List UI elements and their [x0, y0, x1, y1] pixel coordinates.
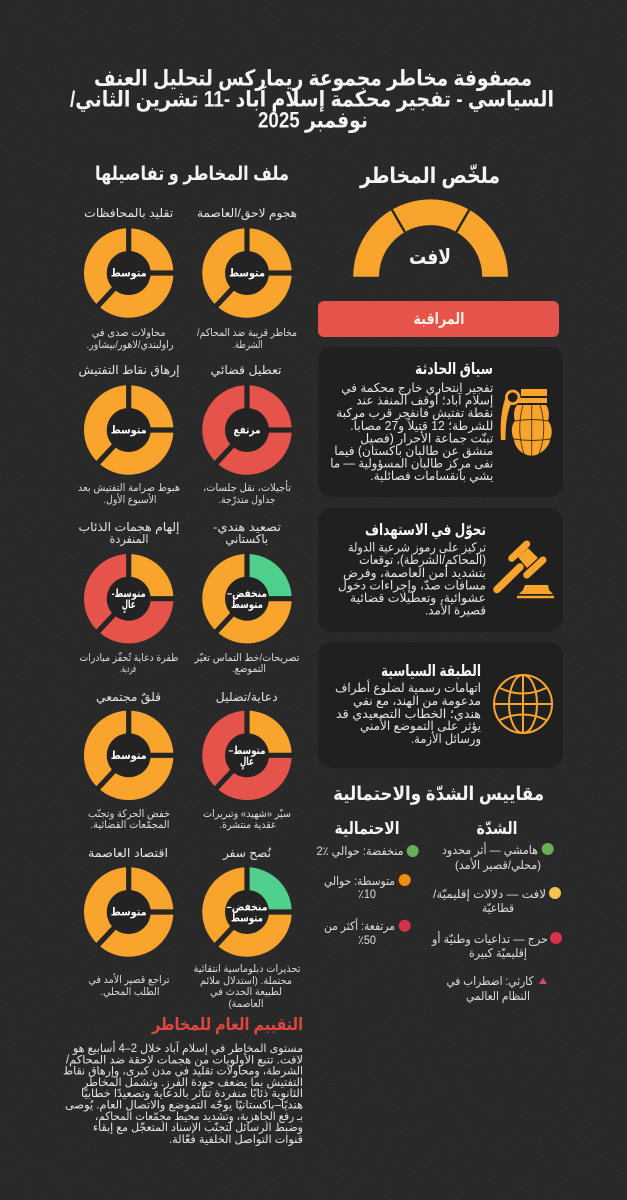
risk card: provincial imitation: راولبندي/لاهور/بيشاور.: [86, 339, 174, 351]
panel body: تركيز على رموز شرعية الدولة: [348, 540, 486, 556]
banner: monitoring: المراقبة: [414, 311, 464, 328]
panel body: نقطة تفتيش فانفجر قرب مركبة: [336, 406, 493, 421]
overall assessment body: هنديًا–باكستانيًا يوجّه التموضع والاتصال العام. يُوصى: [65, 1099, 303, 1113]
overall assessment body: قنوات التواصل الخلفية فعّالة.: [169, 1134, 303, 1147]
panel heading: تحوّل في الاستهداف: [365, 522, 486, 540]
risk card: propaganda and disinformation: [202, 690, 293, 831]
risk card: lone wolf inspiration: [78, 520, 180, 675]
risk card: community anxiety: قلقٌ مجتمعي: [96, 690, 161, 705]
probability: high: مرتفعة: أكثر من: [324, 918, 395, 934]
gauge: [353, 199, 508, 277]
donut chart: متوسط: [111, 906, 147, 918]
risk card: India-Pakistan escalation: تصريحات/خط التماس تغيّر: [194, 652, 300, 664]
probability: medium: [324, 874, 411, 901]
risk card: checkpoint fatigue: الأسبوع الأول.: [104, 493, 156, 506]
donut chart: منخفض–: [227, 588, 267, 600]
risk card: checkpoint fatigue: إرهاق نقاط التفتيش: [78, 363, 180, 378]
donut chart: متوسط-: [112, 588, 146, 600]
severity: notable: [433, 887, 561, 915]
panel body: [338, 540, 486, 618]
overall assessment body: التفتيش بما يضعف جودة الفرز. وتشمل المخاطر: [82, 1077, 303, 1090]
risk card: India-Pakistan escalation: باكستاني: [225, 532, 268, 546]
title: مصفوفة مخاطر مجموعة ريماركس لتحليل العنف: [94, 66, 532, 92]
overall assessment: [63, 1015, 303, 1147]
risk card: travel advisory: نُصح سفر: [222, 846, 271, 861]
donut chart: [84, 553, 175, 643]
probability scale: [316, 819, 419, 947]
banner: monitoring: [318, 301, 559, 337]
donut chart: [84, 866, 175, 957]
overall assessment heading: التقييم العام للمخاطر: [151, 1015, 303, 1035]
probability: medium: متوسطة: حوالي: [324, 874, 395, 889]
donut chart: متوسط: [111, 750, 147, 762]
probability: high: ٪50: [358, 933, 376, 947]
donut chart: متوسط–: [228, 745, 266, 757]
overall assessment body: وضبط الرسائل لتجنّب الإسناد المتعجّل مع إبقاء: [93, 1122, 303, 1135]
risk card: lone wolf inspiration: إلهام هجمات الذئاب: [78, 520, 180, 534]
risk card: travel advisory: [194, 846, 301, 1010]
risk card: judicial disruption: تعطيل قضائي: [210, 363, 282, 377]
panel heading: سياق الحادثة: [415, 361, 493, 378]
panel body: يشي بانقسامات فصائلية.: [370, 469, 494, 483]
donut chart: عالٍ: [240, 756, 254, 770]
risk card: travel advisory: محتملة. (استدلال ملائم: [200, 975, 292, 987]
risk card: provincial imitation: تقليد بالمحافظات: [84, 206, 173, 220]
risk card: travel advisory: العاصمة): [228, 998, 264, 1010]
title: نوفمبر 2025: [258, 108, 368, 134]
donut chart: منخفض–: [226, 902, 268, 914]
icon: grenade: [501, 389, 552, 456]
heading: risk profile: ملف المخاطر و تفاصيلها: [95, 164, 289, 185]
risk card: capital economy: الطلب المحلي.: [100, 986, 160, 998]
panel: targeting shift: [318, 508, 563, 632]
donut chart: [84, 384, 175, 475]
donut chart: [202, 709, 293, 800]
donut chart: [202, 227, 293, 318]
overall assessment body: مستوى المخاطر في إسلام آباد خلال 2–4 أسابيع هو: [72, 1040, 303, 1056]
donut chart: [84, 709, 175, 800]
risk card: follow-up attack: مخاطر قريبة ضد المحاكم/: [197, 327, 297, 339]
donut chart: [84, 227, 175, 318]
probability: low: منخفضة: حوالي ٪2: [316, 844, 404, 859]
risk card: India-Pakistan escalation: التموضع.: [232, 663, 266, 675]
risk card: provincial imitation: [84, 206, 175, 351]
severity: critical: إقليميّة كبيرة: [469, 946, 527, 961]
risk card: lone wolf inspiration: طفرة دعاية تُحفّز مبادرات: [80, 652, 178, 664]
risk card: propaganda and disinformation: عقدية منتشرة.: [220, 819, 276, 831]
panel body: نفى مركز طالبان المسؤولية — ما: [330, 457, 493, 472]
panel body: للشرطة؛ 12 قتيلاً و27 مصاباً.: [350, 416, 493, 434]
overall assessment body: لافت. تتبع الأولويات من هجمات لاحقة ضد المحاكم/: [66, 1052, 303, 1068]
icon: gavel: [497, 544, 554, 597]
risk card: checkpoint fatigue: [78, 363, 180, 506]
title: السياسي - تفجير محكمة إسلام آباد -11 تشرين الثاني/: [70, 84, 554, 112]
panel body: مدعومة من الهند، مع نفي: [353, 694, 481, 709]
risk card: India-Pakistan escalation: [194, 520, 300, 675]
risk card: provincial imitation: محاولات صدى في: [92, 327, 166, 339]
risk card: community anxiety: [84, 690, 175, 831]
panel body: [330, 381, 494, 483]
risk card: India-Pakistan escalation: تصعيد هندي-: [213, 520, 281, 534]
donut chart: مرتفع: [234, 424, 260, 436]
gauge label: لافت: [409, 246, 451, 269]
severity: catastrophic: [446, 974, 547, 1003]
risk card: lone wolf inspiration: المنفردة: [110, 532, 148, 547]
risk card: travel advisory: لطبيعة الحدث في: [210, 986, 282, 998]
risk card: follow-up attack: هجوم لاحق/العاصمة: [197, 206, 297, 221]
severity: critical: حرج — تداعيات وطنيّة أو: [431, 931, 548, 947]
risk card: judicial disruption: جداول متدرّجة.: [218, 494, 276, 506]
panel body: هندي؛ الخطاب التصعيدي قد: [336, 707, 481, 721]
panel body: قصيرة الأمد.: [425, 602, 486, 618]
donut chart: متوسط: [231, 912, 263, 924]
severity: catastrophic: كارثي: اضطراب في: [446, 974, 534, 989]
risk card: community anxiety: خفض الحركة وتجنّب: [88, 808, 170, 820]
panel body: ورسائل الأزمة.: [411, 731, 481, 747]
donut chart: متوسط: [231, 599, 263, 611]
risk card: capital economy: [84, 846, 175, 998]
panel body: منشق عن طالبان باكستان) فيما: [334, 444, 493, 459]
donut chart: متوسط: [111, 268, 147, 280]
severity: notable: لافت — دلالات إقليميّة/: [433, 887, 546, 901]
risk card: propaganda and disinformation: دعاية/تضليل: [216, 690, 278, 704]
donut chart: [202, 866, 293, 957]
risk card: community anxiety: المجمّعات القضائية.: [90, 819, 170, 831]
overall assessment body: الثانوية ذئابًا منفردة تتأثر بالدعاية وتصعيدًا خطابيًا: [81, 1085, 303, 1101]
risk card: checkpoint fatigue: هبوط صرامة التفتيش بعد: [78, 482, 180, 494]
donut chart: عالٍ: [122, 599, 136, 614]
panel body: اتهامات رسمية لضلوع أطراف: [335, 679, 481, 696]
donut chart: [202, 553, 293, 643]
panel body: [335, 679, 481, 747]
overall assessment body: بـ رفع الجاهزية، وتشديد محيط مجمّعات المحاكم،: [95, 1111, 303, 1124]
panel body: تفجير انتحاري خارج محكمة في: [341, 381, 494, 396]
severity: catastrophic: النظام العالمي: [466, 989, 530, 1003]
title: [70, 66, 554, 134]
severity: marginal: هامشي — أثر محدود: [442, 842, 538, 858]
heading: severity and probability scales: مقاييس الشدّة والاحتمالية: [333, 784, 544, 805]
severity: notable: قطاعيّة: [482, 901, 514, 915]
donut chart: متوسط: [229, 268, 265, 280]
severity scale: الشدّة: [476, 819, 518, 838]
panel body: عشوائية، وتعطيلات قضائية: [350, 591, 486, 606]
risk card: follow-up attack: الشرطة.: [233, 339, 263, 351]
risk card: judicial disruption: [202, 363, 293, 506]
panel heading: الطبقة السياسية: [381, 663, 481, 680]
panel body: إسلام آباد؛ أوقف المنفذ عند: [356, 392, 493, 409]
risk card: lone wolf inspiration: فردية.: [120, 663, 136, 675]
panel: incident context: [318, 347, 563, 497]
risk card: capital economy: اقتصاد العاصمة: [88, 846, 168, 860]
panel body: (المحاكم/الشرطة)، توقعات: [359, 553, 486, 568]
risk card: travel advisory: تحذيرات دبلوماسية انتقائية: [194, 963, 301, 975]
icon: globe: [494, 675, 552, 733]
risk card: judicial disruption: تأجيلات، نقل جلسات،: [203, 480, 291, 494]
panel body: بتشديد أمن العاصمة، وفرض: [343, 564, 486, 581]
panel body: تبنّت جماعة الأحرار (فصيل: [360, 430, 494, 446]
severity: marginal: (محلي/قصير الأمد): [455, 857, 541, 873]
panel: political layer: [318, 642, 563, 768]
probability scale: الاحتمالية: [334, 819, 400, 838]
probability: high: [324, 918, 411, 947]
risk card: capital economy: تراجع قصير الأمد في: [88, 973, 170, 986]
severity: critical: [431, 931, 562, 961]
donut chart: متوسط: [111, 424, 147, 436]
probability: medium: ٪10: [358, 887, 376, 901]
panel body: مسافات صدّ، وإجراءات دخول: [338, 578, 486, 594]
panel body: يؤثر على التموضع الأمني: [360, 718, 481, 734]
risk card: follow-up attack: [197, 206, 297, 351]
heading: risk summary: ملخّص المخاطر: [359, 163, 500, 189]
severity scale: [431, 819, 562, 1003]
overall assessment body: [63, 1040, 303, 1147]
donut chart: [202, 384, 293, 475]
overall assessment body: الشرطة، ومحاولات تقليد في مدن كبرى، وإرهاق نقاط: [63, 1066, 303, 1079]
risk card: propaganda and disinformation: سيْر «شهيد» وتبريرات: [203, 808, 291, 820]
severity: marginal: [442, 842, 554, 873]
